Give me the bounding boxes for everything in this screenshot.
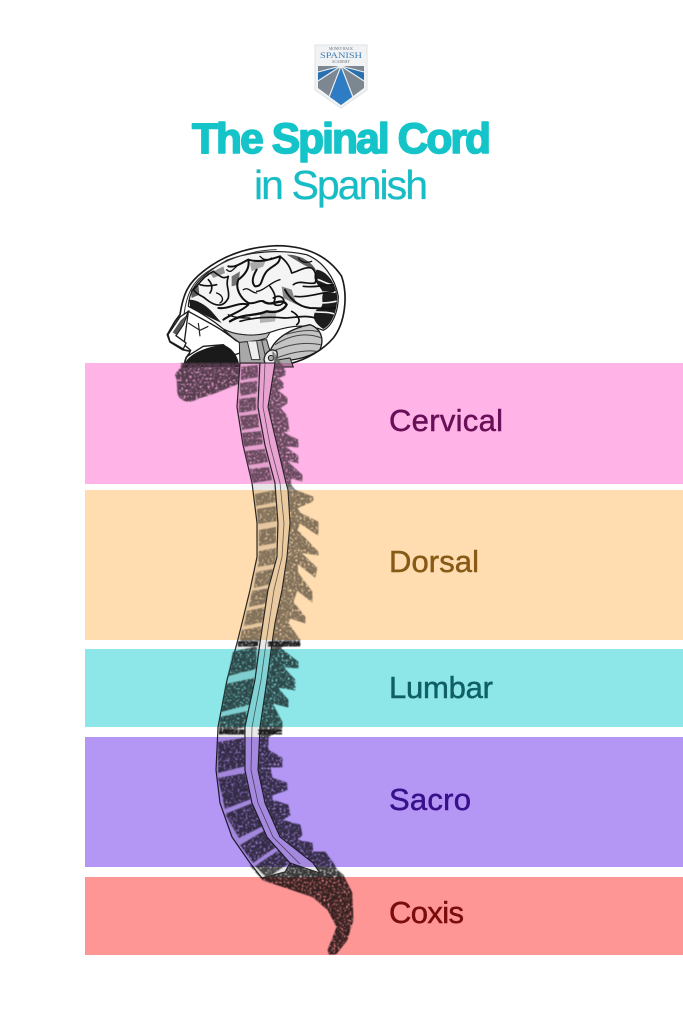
label: Coxis: Coxis: [389, 895, 464, 930]
cerebellum: [270, 325, 322, 360]
logo: academy shield: ACADEMY: [332, 60, 350, 64]
lower jaw: [175, 363, 241, 402]
band: coxis: [85, 877, 683, 955]
logo: academy shield: SPANISH: [320, 51, 362, 60]
label: Cervical: Cervical: [389, 403, 503, 438]
lower temporal lobe: [223, 329, 270, 343]
brain stem and neck: [239, 340, 293, 367]
band: dorsal: [85, 490, 683, 640]
vertebral column: [216, 363, 290, 878]
band: sacro: [85, 737, 683, 867]
palate: [183, 345, 239, 367]
label: Sacro: Sacro: [389, 782, 471, 817]
vertebra bodies: [218, 365, 291, 878]
dark brain shading: [189, 255, 337, 329]
illustration: brain and spine: [167, 246, 353, 954]
brain and skull: [167, 246, 345, 367]
label: Lumbar: Lumbar: [389, 670, 493, 705]
dark edges at band gaps: [219, 644, 300, 732]
band: lumbar: [85, 649, 683, 727]
coccyx: [250, 860, 353, 954]
logo: academy shield: [315, 45, 367, 108]
spinal canal: [245, 363, 320, 873]
label: Dorsal: Dorsal: [389, 544, 479, 579]
title: The Spinal Cord: The Spinal Cord: [192, 116, 491, 163]
subtitle: in Spanish: in Spanish: [254, 162, 428, 208]
face cavity and nose: [184, 311, 240, 356]
processes (back of spine): [258, 350, 343, 875]
white streaks over dark shading: [312, 280, 336, 314]
logo: academy shield: MONEY BACK: [329, 47, 353, 51]
brain creases: [193, 256, 335, 325]
band: cervical: [85, 363, 683, 484]
